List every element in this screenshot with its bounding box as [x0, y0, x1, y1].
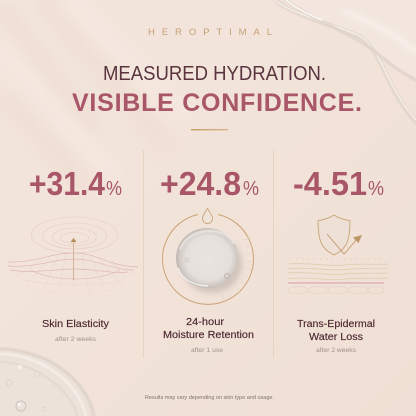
label: Trans-Epidermal [297, 318, 375, 330]
stat: +24.8%: +24.8 [160, 165, 241, 202]
icon: serum gel drop [176, 228, 242, 293]
percent sign: % [243, 178, 259, 200]
stat: -4.51%: -4.51 [293, 165, 367, 202]
percent sign: % [368, 178, 384, 200]
decorative gel swoosh, top right [275, 0, 416, 122]
stat: +31.4%: +31.4 [29, 165, 106, 202]
sublabel: after 2 weeks [316, 347, 357, 354]
panel: trans-epidermal water loss [288, 165, 388, 354]
sublabel: after 2 weeks [55, 336, 97, 343]
label: Moisture Retention [163, 329, 254, 341]
icon: droplet [202, 208, 212, 224]
title line 2: VISIBLE CONFIDENCE. [72, 89, 362, 117]
panel: skin elasticity [8, 165, 138, 343]
gold divider under title [191, 129, 228, 130]
label: Skin Elasticity [42, 318, 110, 330]
icon: tick marks [222, 238, 252, 300]
label: Water Loss [309, 331, 363, 343]
sublabel: after 1 use [191, 347, 223, 354]
title line 1: MEASURED HYDRATION. [103, 62, 326, 85]
icon: progress ring [162, 214, 253, 304]
label [163, 316, 254, 341]
column dividers [144, 150, 274, 358]
decorative gel droplet pool, bottom left [0, 349, 94, 416]
brand name: HEROPTIMAL [148, 27, 272, 38]
icon: skin layers [288, 259, 388, 294]
title [72, 62, 362, 117]
icon: shield with down-up arrow [318, 215, 362, 255]
panel: moisture retention [160, 165, 259, 354]
footnote: Results may vary depending on skin type and usage. [145, 395, 274, 401]
label: 24-hour [186, 316, 225, 328]
percent sign: % [106, 178, 122, 200]
label [297, 318, 375, 343]
icon: elastic skin grid with arrow [8, 217, 138, 298]
